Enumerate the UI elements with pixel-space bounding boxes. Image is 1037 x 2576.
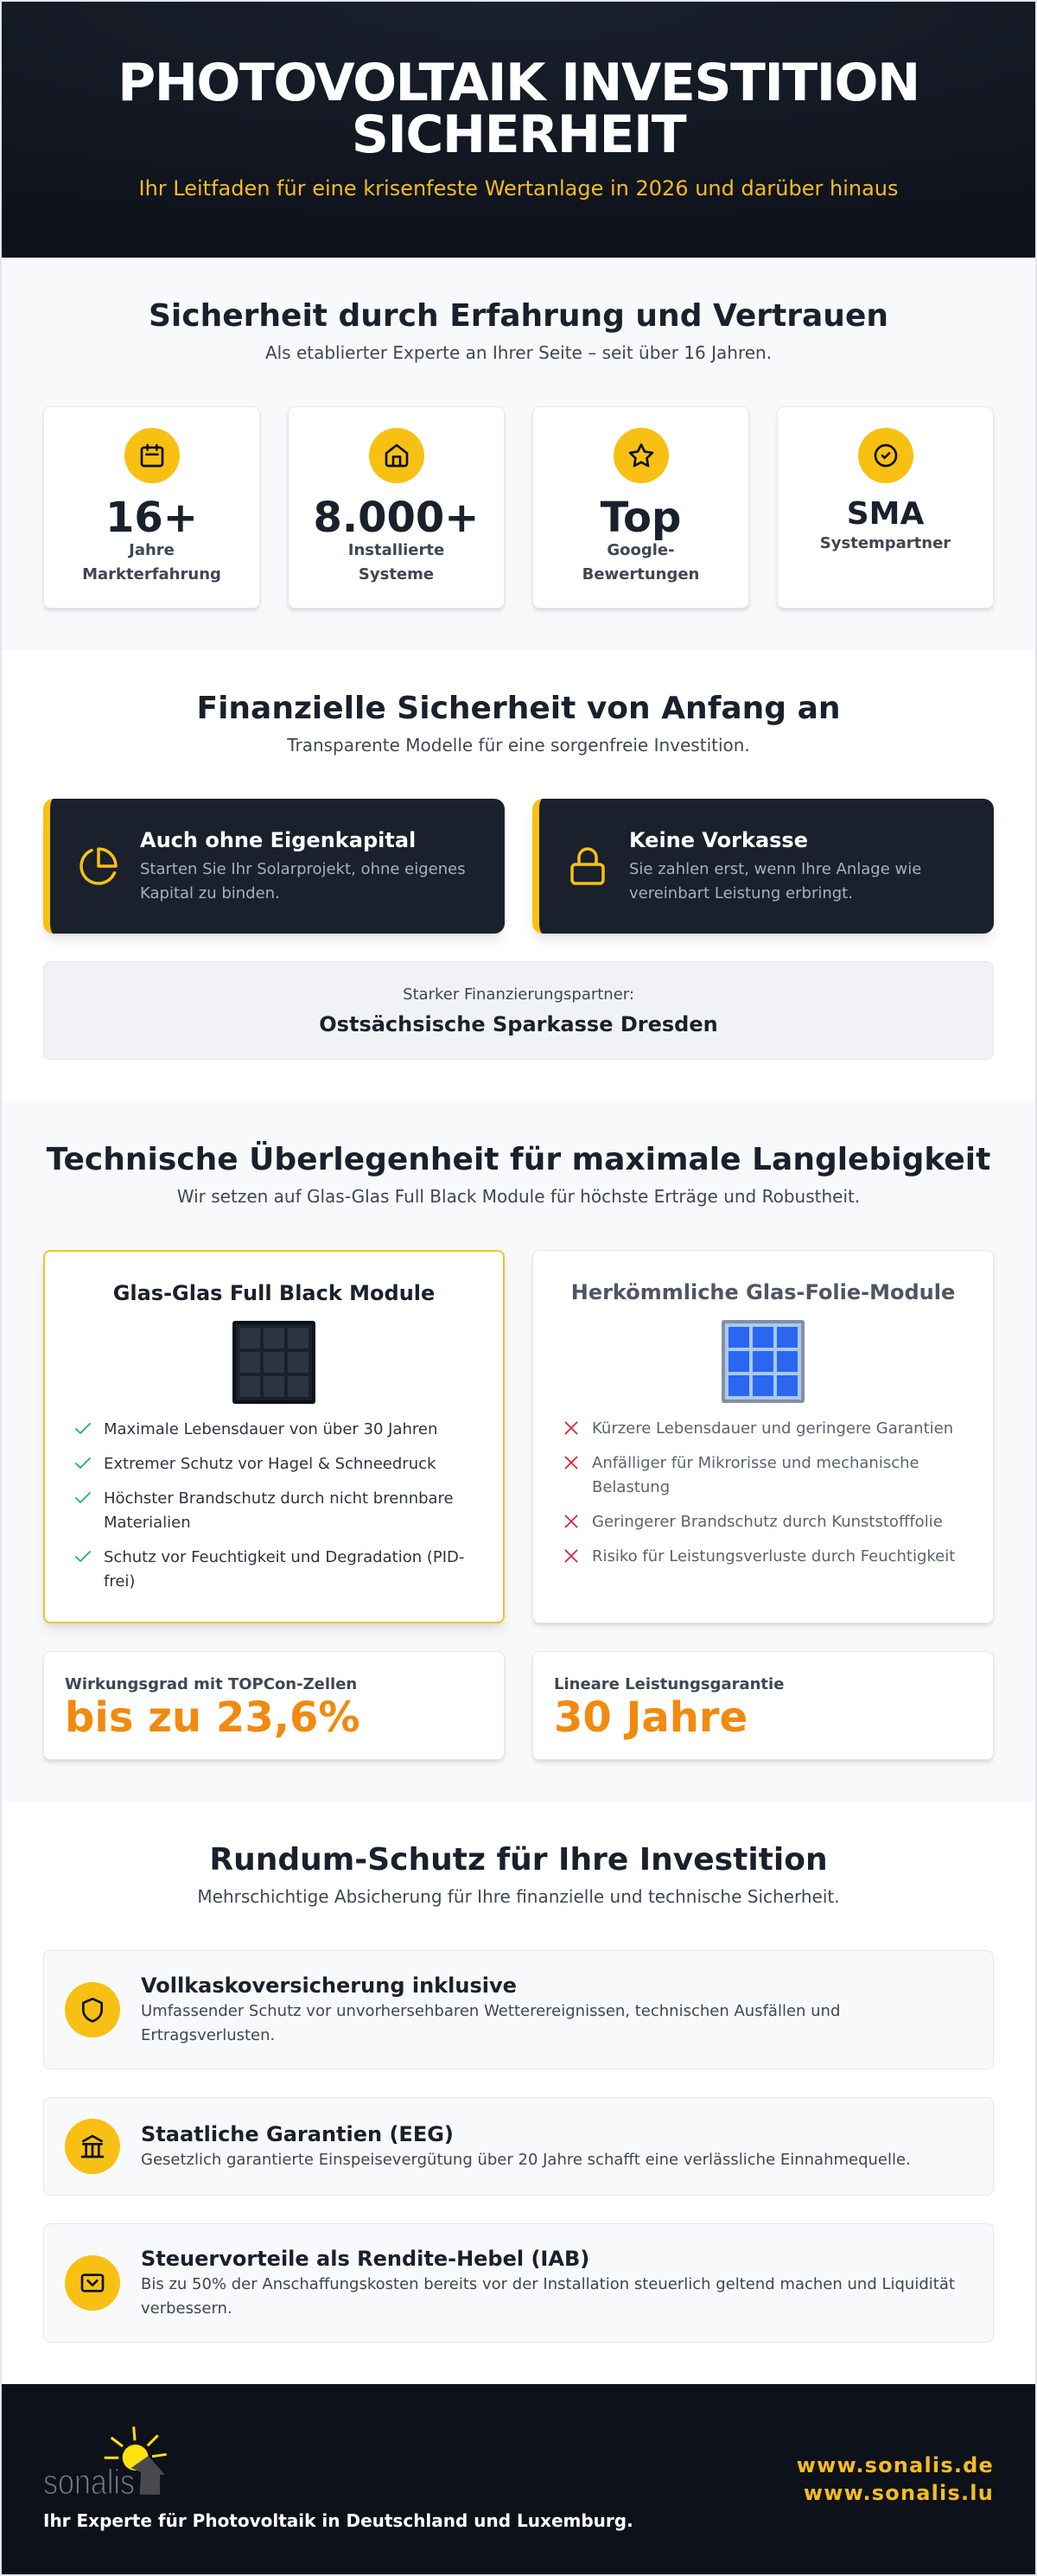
item text: Staatliche Garantien (EEG) bbox=[141, 2122, 454, 2146]
websites: www.sonalis.lu bbox=[804, 2481, 994, 2505]
item text bbox=[141, 2122, 911, 2169]
label: Google- bbox=[607, 541, 675, 559]
icon: lock bbox=[570, 847, 605, 885]
section heading bbox=[149, 298, 888, 363]
label: Bewertungen bbox=[582, 565, 699, 583]
number: 8.000+ bbox=[313, 494, 480, 542]
icon: shield bbox=[65, 1982, 120, 2037]
label: Systeme bbox=[359, 565, 434, 583]
protection items bbox=[43, 1950, 994, 2343]
card text: Auch ohne Eigenkapital bbox=[140, 828, 416, 852]
icon: blue solar module bbox=[722, 1320, 805, 1403]
logo: sonalis bbox=[43, 2426, 167, 2495]
benefits list: Höchster Brandschutz durch nicht brennbare Materialien bbox=[104, 1489, 454, 1532]
item text: Steuervorteile als Rendite-Hebel (IAB) bbox=[141, 2247, 589, 2271]
footer bbox=[2, 2384, 1035, 2574]
module comparison bbox=[42, 1250, 995, 1632]
label: Jahre Markterfahrung bbox=[82, 541, 221, 583]
icon: star bbox=[614, 428, 669, 483]
stat card: installed systems bbox=[288, 406, 505, 609]
icon: house bbox=[368, 428, 423, 483]
item text bbox=[141, 2247, 955, 2318]
panel: experience and trust bbox=[2, 258, 1035, 650]
stat card: google reviews bbox=[532, 406, 749, 609]
financing partner box bbox=[43, 961, 994, 1060]
drawbacks list: Geringerer Brandschutz durch Kunststofffolie bbox=[592, 1513, 943, 1531]
section heading: Sicherheit durch Erfahrung und Vertrauen bbox=[149, 298, 888, 334]
tagline: Ihr Experte für Photovoltaik in Deutschland und Luxemburg. bbox=[43, 2510, 633, 2531]
comparison card: glass-foil bbox=[532, 1250, 994, 1623]
card text bbox=[140, 828, 466, 902]
card heading: Herkömmliche Glas-Folie-Module bbox=[571, 1280, 955, 1304]
benefits list: Extremer Schutz vor Hagel & Schneedruck bbox=[104, 1455, 436, 1473]
section heading: Transparente Modelle für eine sorgenfreie Investition. bbox=[287, 735, 750, 756]
icon: black solar module bbox=[232, 1321, 315, 1404]
card text: Keine Vorkasse bbox=[629, 828, 808, 852]
icon: calendar bbox=[124, 428, 180, 483]
title bbox=[118, 53, 919, 165]
drawbacks list: Kürzere Lebensdauer und geringere Garantien bbox=[592, 1419, 953, 1438]
section heading bbox=[196, 691, 840, 756]
section heading: Mehrschichtige Absicherung für Ihre finanzielle und technische Sicherheit. bbox=[197, 1886, 840, 1907]
item text: Gesetzlich garantierte Einspeisevergütung über 20 Jahre schafft eine verlässliche Einnahmequelle. bbox=[141, 2151, 911, 2169]
icon: bank bbox=[65, 2119, 120, 2174]
section heading: Als etablierter Experte an Ihrer Seite – seit über 16 Jahren. bbox=[265, 342, 772, 363]
item text: Bis zu 50% der Anschaffungskosten bereits vor der Installation steuerlich geltend machen und Liquidität verbessern. bbox=[141, 2275, 955, 2318]
panel: technical superiority bbox=[2, 1101, 1035, 1801]
number: 16+ bbox=[105, 494, 198, 542]
footer left block bbox=[43, 2426, 633, 2531]
subtitle: Ihr Leitfaden für eine krisenfeste Wertanlage in 2026 und darüber hinaus bbox=[138, 176, 899, 201]
title: SICHERHEIT bbox=[352, 105, 685, 165]
card: no prepayment bbox=[532, 799, 994, 934]
card text: Starten Sie Ihr Solarprojekt, ohne eigenes Kapital zu binden. bbox=[140, 860, 466, 902]
websites: www.sonalis.de bbox=[797, 2453, 994, 2477]
stat card: system partner bbox=[777, 406, 994, 609]
key figure: warranty: 30 Jahre bbox=[554, 1693, 748, 1742]
drawbacks list: Risiko für Leistungsverluste durch Feuchtigkeit bbox=[592, 1547, 955, 1565]
websites bbox=[797, 2453, 994, 2505]
financing cards row bbox=[42, 799, 995, 942]
benefits list: Schutz vor Feuchtigkeit und Degradation (PID-frei) bbox=[104, 1548, 464, 1591]
section heading: Rundum-Schutz für Ihre Investition bbox=[209, 1842, 828, 1878]
title: PHOTOVOLTAIK INVESTITION bbox=[118, 53, 919, 113]
financing partner box: Ostsächsische Sparkasse Dresden bbox=[319, 1012, 718, 1036]
key figure: warranty: Lineare Leistungsgarantie bbox=[554, 1675, 784, 1693]
card text bbox=[629, 828, 921, 902]
stat cards row bbox=[42, 406, 995, 612]
label: Installierte bbox=[348, 541, 444, 559]
benefits list bbox=[75, 1420, 464, 1591]
number: Top bbox=[601, 494, 681, 542]
section heading: Wir setzen auf Glas-Glas Full Black Module für höchste Erträge und Robustheit. bbox=[177, 1186, 860, 1207]
item text: Vollkaskoversicherung inklusive bbox=[141, 1973, 517, 1998]
section heading: Technische Überlegenheit für maximale Langlebigkeit bbox=[47, 1142, 990, 1177]
drawbacks list bbox=[565, 1419, 955, 1565]
item: insurance bbox=[43, 1950, 994, 2069]
item text bbox=[141, 1973, 840, 2044]
item: tax benefits bbox=[43, 2223, 994, 2343]
key figures row bbox=[42, 1651, 995, 1763]
item: state guarantees bbox=[43, 2097, 994, 2196]
icon: circle check bbox=[857, 428, 913, 483]
panel: all-round protection bbox=[43, 1842, 994, 2343]
label bbox=[582, 541, 699, 583]
stat card: years bbox=[43, 406, 260, 609]
financing partner box: Starker Finanzierungspartner: bbox=[403, 985, 634, 1004]
section heading: Finanzielle Sicherheit von Anfang an bbox=[196, 691, 840, 726]
section heading bbox=[197, 1842, 840, 1907]
key figure: efficiency: Wirkungsgrad mit TOPCon-Zellen bbox=[65, 1675, 357, 1693]
benefits list: Maximale Lebensdauer von über 30 Jahren bbox=[104, 1420, 437, 1438]
label: Systempartner bbox=[820, 534, 951, 552]
number: SMA bbox=[847, 496, 924, 532]
key figure: efficiency: bis zu 23,6% bbox=[65, 1693, 359, 1742]
icon: tax box bbox=[65, 2255, 120, 2311]
key figure: warranty bbox=[532, 1651, 994, 1760]
label bbox=[348, 541, 444, 583]
section heading bbox=[47, 1141, 990, 1207]
item text: Umfassender Schutz vor unvorhersehbaren Wetterereignissen, technischen Ausfällen und Ertragsverlusten. bbox=[141, 2002, 840, 2044]
panel: financial security bbox=[42, 691, 995, 1060]
drawbacks list: Anfälliger für Mikrorisse und mechanische Belastung bbox=[592, 1454, 919, 1496]
key figure: efficiency bbox=[43, 1651, 505, 1760]
comparison card: glass-glass bbox=[43, 1250, 505, 1623]
icon: pie chart bbox=[80, 847, 118, 885]
card heading: Glas-Glas Full Black Module bbox=[113, 1281, 435, 1305]
card: no equity bbox=[43, 799, 505, 934]
header banner bbox=[2, 2, 1035, 258]
card text: Sie zahlen erst, wenn Ihre Anlage wie vereinbart Leistung erbringt. bbox=[629, 860, 921, 902]
